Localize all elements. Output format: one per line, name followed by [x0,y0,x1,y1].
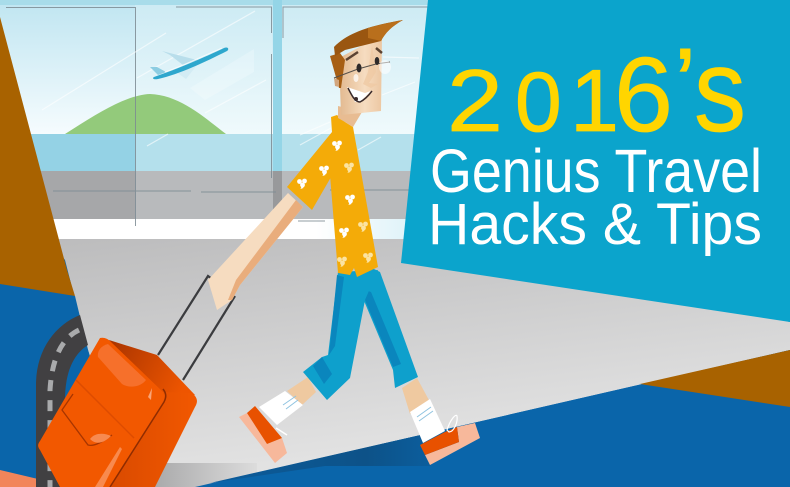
hill [65,94,226,134]
suitcase [38,276,235,487]
shirt [287,115,378,277]
heading: 2016's: ’ [674,28,696,140]
heading: 2016's: s [694,25,746,157]
blue ground left [0,284,130,487]
window frame lines [6,7,430,250]
shirt pattern [297,141,373,267]
ear [334,78,339,87]
floor [50,239,790,487]
front leg [239,377,316,463]
heading: 2016's: 2 [447,51,503,150]
heading: 2016's: 6 [614,36,673,154]
back leg [402,378,480,465]
window glare streaks [42,11,419,150]
trousers [303,268,418,400]
brown wall left [0,17,75,296]
brown wedge right [640,350,790,407]
neck [338,106,362,127]
blue ground right wedge [195,350,790,487]
airplane [150,47,228,79]
salmon corner [0,470,38,487]
arm [208,193,303,310]
glasses [334,62,390,78]
suitcase handles [158,276,235,380]
heading: Hacks & Tips: Hacks & Tips [428,192,762,257]
airport window background [0,0,430,239]
head [330,20,403,115]
panel: title banner [401,0,790,322]
road [36,315,88,487]
man [208,20,480,465]
heading: 2016's: 1 [570,51,619,150]
heading: 2016's: 0 [515,55,562,149]
